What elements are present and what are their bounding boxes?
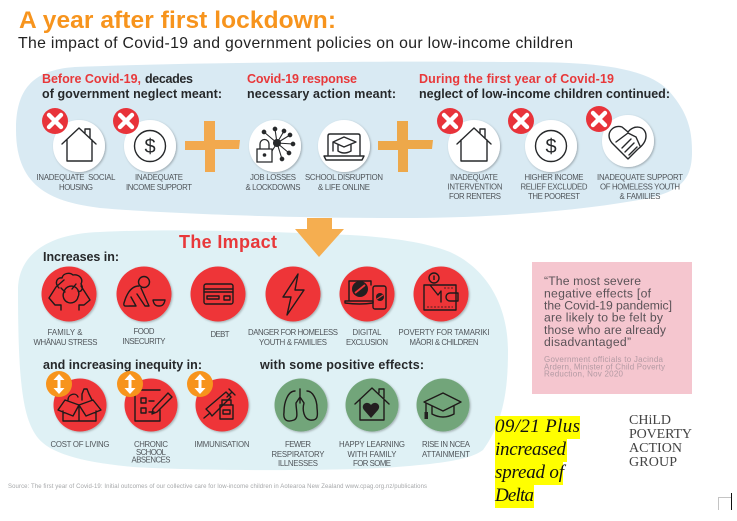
label: inadequate intervention for renters: INADEQUATE [450, 173, 498, 182]
logo: Child Poverty Action Group [629, 413, 692, 470]
label: danger for homeless youth and families: YOUTH & FAMILIES [259, 338, 327, 347]
label: immunisation: IMMUNISATION [194, 440, 250, 449]
label: higher income relief excluded the poorest: RELIEF EXCLUDED [520, 182, 588, 192]
quote text: the Covid-19 pandemic] [544, 298, 672, 312]
label: school disruption and life online [305, 173, 383, 192]
label: higher income relief excluded the poorest: HIGHER INCOME [524, 173, 584, 182]
label: happy learning with family: WITH FAMILY [348, 450, 397, 459]
icon: digital exclusion [340, 266, 394, 322]
label: family and whanau stress: WHĀNAU STRESS [34, 338, 98, 347]
label: inadequate intervention for renters [448, 173, 502, 201]
label: food insecurity: FOOD [134, 327, 155, 336]
heading: the impact: The Impact [179, 232, 277, 252]
label: fewer respiratory illnesses: RESPIRATORY [272, 450, 325, 459]
quote text: negative effects [of [544, 286, 652, 300]
handwritten note: Delta: Delta [494, 485, 534, 506]
source note: Source: The first year of Covid-19: Initial outcomes of our collective care for low-income children in Aotearoa New Zealand www.cpag.org.nz/publications [8, 484, 427, 490]
label: digital exclusion: EXCLUSION [346, 338, 388, 347]
icon: fewer respiratory illnesses [274, 378, 328, 432]
quote attribution [544, 355, 665, 378]
heading: Covid-19 response: Covid-19 response [247, 72, 357, 86]
icon: happy learning with family [346, 378, 398, 432]
logo: Child Poverty Action Group: ACTION [629, 441, 682, 456]
label: inadequate income support [126, 173, 192, 192]
heading: before Covid-19: Before Covid-19, [42, 72, 141, 86]
label: chronic school absences: SCHOOL [136, 448, 167, 457]
icon: chronic school absences [117, 371, 178, 432]
icon: plus [378, 121, 433, 172]
label: happy learning with family [339, 440, 405, 468]
label: family and whanau stress [34, 328, 98, 347]
label: inadequate support of homeless youth and families: & FAMILIES [620, 192, 660, 201]
label: inadequate support of homeless youth and families: OF HOMELESS YOUTH [600, 182, 680, 192]
label: inadequate income support: INCOME SUPPORT [126, 183, 192, 192]
icon: inadequate income support [113, 108, 176, 172]
icon: school disruption and life online [318, 120, 370, 172]
icon: plus [185, 121, 240, 172]
arrow: down to the impact [295, 218, 344, 257]
icon: debt [190, 266, 246, 322]
label: inadequate social housing: HOUSING [59, 183, 93, 192]
label: job losses and lockdowns: JOB LOSSES [250, 173, 296, 182]
subtitle: The impact of Covid-19 and government policies on our low-income children [18, 35, 573, 52]
heading: during the first year [419, 72, 670, 101]
label: food insecurity: INSECURITY [122, 337, 166, 346]
icon: immunisation [187, 371, 248, 432]
heading: Covid-19 response: necessary action meant: [247, 87, 396, 101]
label: danger for homeless youth and families: DANGER FOR HOMELESS [248, 328, 338, 337]
heading: increases in: Increases in: [43, 250, 119, 264]
icon: danger for homeless youth and families [266, 266, 320, 322]
label: happy learning with family: HAPPY LEARNING [339, 440, 405, 449]
label: inadequate intervention for renters: FOR RENTERS [449, 192, 501, 201]
label: chronic school absences [132, 440, 170, 464]
logo: Child Poverty Action Group: POVERTY [629, 427, 692, 442]
label: digital exclusion [346, 328, 388, 347]
quote attribution: Reduction, Nov 2020 [544, 370, 624, 378]
label: inadequate support of homeless youth and families [597, 173, 683, 201]
title: A year after first lockdown: [19, 7, 336, 34]
icon: cost of living [46, 371, 106, 432]
icon: higher income relief excluded the poorest: $ [545, 136, 557, 158]
label: digital exclusion: DIGITAL [352, 328, 382, 337]
quote text: “The most severe [544, 274, 641, 288]
logo: Child Poverty Action Group: GROUP [629, 455, 677, 470]
handwritten note: Delta: increased [495, 439, 566, 460]
label: rise in NCEA attainment: RISE IN NCEA [422, 440, 471, 449]
icon: higher income relief excluded the poorest [508, 108, 577, 172]
icon: inadequate intervention for renters [437, 108, 500, 172]
label: fewer respiratory illnesses: ILLNESSES [278, 459, 318, 468]
icon: food insecurity [116, 266, 172, 322]
panel: causes and response [16, 62, 692, 218]
label: rise in NCEA attainment [422, 440, 471, 459]
heading: Covid-19 response [247, 72, 396, 101]
label: poverty for tamariki maori and children: POVERTY FOR TAMARIKI [398, 328, 490, 337]
label: inadequate support of homeless youth and families: INADEQUATE SUPPORT [597, 173, 683, 182]
quote attribution: Ardern, Minister of Child Poverty [544, 362, 665, 372]
label: inadequate income support: INADEQUATE [135, 173, 183, 182]
label: fewer respiratory illnesses: FEWER [285, 440, 311, 449]
icon: inadequate income support: $ [144, 136, 156, 158]
heading: before Covid-19: of government neglect meant: [42, 87, 222, 101]
icon: inadequate social housing [42, 108, 105, 172]
label: food insecurity [122, 327, 166, 346]
label: higher income relief excluded the poorest [520, 173, 588, 201]
label: inadequate social housing: INADEQUATE SOCIAL [36, 173, 116, 182]
quote attribution: Government officials to Jacinda [544, 355, 664, 364]
label: higher income relief excluded the poorest: THE POOREST [528, 192, 580, 201]
handwritten note: Delta [494, 416, 580, 508]
label: chronic school absences: ABSENCES [132, 456, 170, 464]
label: danger for homeless youth and families [248, 328, 338, 347]
heading: increasing inequity: and increasing inequity in: [43, 358, 202, 372]
label: cost of living: COST OF LIVING [50, 440, 110, 449]
panel: quote [532, 262, 692, 394]
quote text: those who are already [544, 323, 667, 337]
heading: during the first year: neglect of low-income children continued: [419, 87, 670, 101]
heading: during the first year: During the first year of Covid-19 [419, 72, 614, 86]
handwritten note: Delta: spread of [495, 462, 567, 483]
label: fewer respiratory illnesses [272, 440, 325, 468]
quote text: are likely to be felt by [544, 311, 664, 325]
icon: inadequate support of homeless youth and families [586, 106, 654, 167]
label: happy learning with family: FOR SOME [353, 459, 391, 468]
label: rise in NCEA attainment: ATTAINMENT [422, 450, 470, 459]
handwritten note: Delta: 09/21 Plus [495, 416, 580, 437]
quote text [544, 274, 672, 349]
panel: the impact [18, 230, 508, 470]
quote text: disadvantaged” [544, 335, 631, 349]
label: poverty for tamariki maori and children [398, 328, 490, 347]
heading: before Covid-19 [42, 72, 222, 101]
label: job losses and lockdowns: & LOCKDOWNS [246, 183, 300, 192]
label: family and whanau stress: FAMILY & [48, 328, 83, 337]
label: inadequate social housing [36, 173, 116, 192]
logo: Child Poverty Action Group: CHiLD [629, 413, 671, 428]
icon: poverty for tamariki maori and children [414, 266, 468, 322]
heading: before Covid-19: decades [145, 72, 193, 86]
label: chronic school absences: CHRONIC [134, 440, 168, 449]
label: poverty for tamariki maori and children: MĀORI & CHILDREN [410, 338, 478, 347]
icon: rise in NCEA attainment [416, 378, 470, 432]
label: inadequate intervention for renters: INTERVENTION [448, 182, 502, 192]
label: school disruption and life online: SCHOOL DISRUPTION [305, 173, 383, 182]
icon: family and whanau stress [42, 266, 96, 322]
label: debt: DEBT [210, 330, 230, 339]
heading: positive effects: with some positive effects: [259, 358, 424, 372]
icon: job losses and lockdowns [249, 120, 301, 172]
label: school disruption and life online: & LIFE ONLINE [318, 183, 370, 192]
label: job losses and lockdowns [246, 173, 300, 192]
